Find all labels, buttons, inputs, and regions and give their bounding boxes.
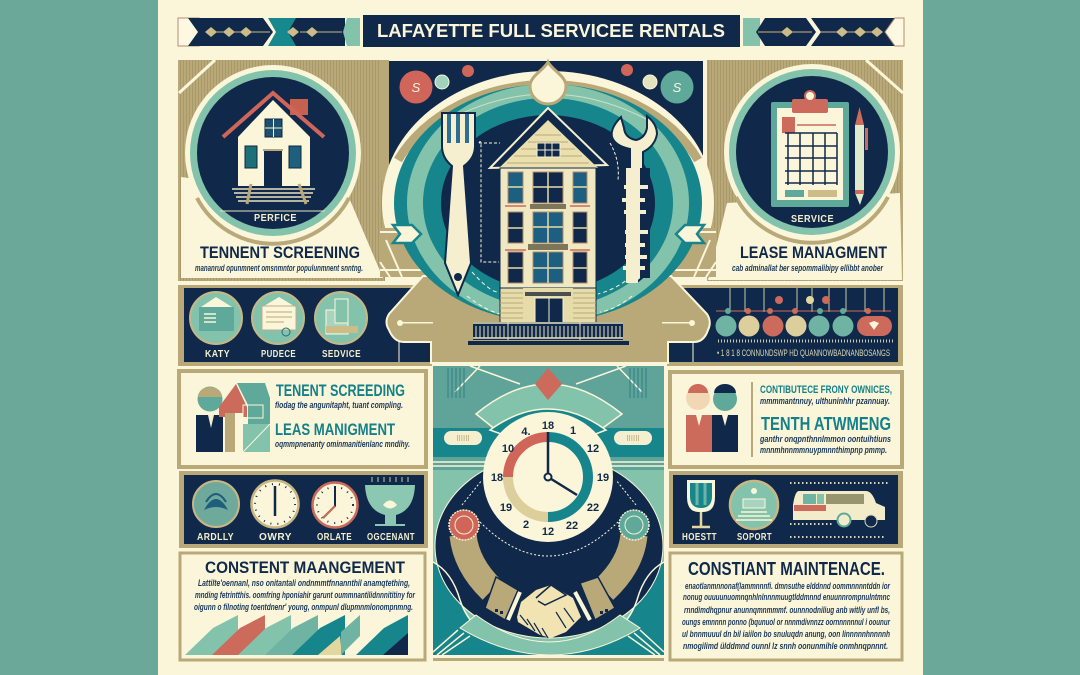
title	[363, 15, 740, 47]
title: LAFAYETTE FULL SERVICEE RENTALS	[377, 20, 725, 41]
connector left	[380, 228, 430, 277]
right ribbon	[743, 18, 904, 46]
icon: emblem	[730, 481, 778, 529]
label: perfice: PERFICE	[254, 213, 297, 224]
icon: van	[793, 491, 885, 527]
label: orlate: ORLATE	[317, 532, 352, 543]
left ribbon	[178, 18, 360, 46]
icon: listing card	[190, 292, 242, 344]
icon: building	[315, 292, 367, 344]
icon: document	[252, 292, 304, 344]
arm left	[463, 535, 492, 590]
seal left	[449, 510, 479, 540]
icon: clock one	[252, 480, 298, 528]
seal right	[619, 510, 649, 540]
body text: ul bnnmuuul dn bil iaiilon bo snuluqdn anung, oon Iinnnnnhnnnnh	[682, 629, 890, 639]
icon: coin right	[621, 64, 694, 104]
navy backdrop	[435, 454, 663, 638]
panel: lease management	[707, 60, 903, 281]
icon: bowl	[365, 477, 415, 526]
body text: nonug ouuuunuomnqnhlnlnnnmuugtlddmnnd enuunnrompnulntmnc	[683, 592, 890, 602]
body text	[194, 578, 415, 612]
clock numerals: 2	[523, 519, 529, 531]
caption: ganthr onqpnthnnlmmon oontuihtiuns	[759, 434, 891, 444]
pill right	[614, 431, 652, 445]
icon: fork	[442, 113, 475, 295]
icon: coin left: S	[412, 80, 421, 95]
panel: icon strip left	[178, 285, 432, 366]
icon: pen	[855, 107, 868, 205]
panel: clock icon strip	[179, 471, 428, 548]
label: sedvice: SEDVICE	[322, 349, 361, 360]
clock numerals: 19	[597, 472, 609, 484]
icon: coin left	[400, 65, 474, 104]
heading: lease management: LEASE MANAGMENT	[740, 244, 887, 262]
clock numerals: 22	[566, 520, 578, 532]
icon: house	[223, 93, 324, 204]
heading: CONSTENT MAANGEMENT	[205, 558, 406, 577]
panel: central building emblem	[380, 60, 716, 363]
body text: mnding fetrintthis. oomfring hponiahir garunt oummnantilidnnnititiny for	[195, 590, 415, 600]
body text: oigunn o filnoting toentdnenr' young, onmpunl dlupmnmlonompnmng.	[194, 602, 413, 612]
icon: coin right: S	[673, 80, 682, 95]
fine print: • 1 8 1 8 CONNUNDSWP HD QUANNOWBADNANBOSANGS	[717, 348, 890, 358]
clock numerals: 12	[587, 443, 599, 455]
body text	[682, 581, 890, 651]
caption: oqmmpnenanty ominmanitienlanc mndihy.	[275, 439, 410, 449]
clock numerals: 19	[500, 502, 512, 514]
header band	[178, 15, 904, 47]
clock numerals: 18	[491, 472, 503, 484]
pill left: IIIIII	[456, 434, 470, 443]
dots row	[716, 316, 892, 336]
pill right: IIIIII	[626, 434, 640, 443]
label: ogcenant: OGCENANT	[367, 532, 415, 543]
panel: constent management	[180, 553, 425, 660]
label: ardlly: ARDLLY	[197, 532, 234, 543]
arm right	[604, 535, 634, 590]
porch	[468, 322, 629, 345]
clock numerals: 22	[587, 502, 599, 514]
clock	[483, 412, 613, 542]
caption: mananrud opunmnent omsnmntor populunmnent snntng.	[195, 263, 363, 273]
icon: glass	[687, 480, 715, 527]
arrow right	[676, 225, 704, 243]
caption: cab adminallat ber sepommalibipy ellibbt anober	[732, 263, 883, 273]
caption: mnnmhnnmmnuypmnnthimpnp pmmp.	[760, 445, 887, 455]
panel: timeline strip right	[667, 285, 903, 366]
heading: CONSTIANT MAINTENACE.	[688, 559, 885, 579]
chart: stepped chevrons	[185, 615, 408, 655]
lower band	[460, 615, 640, 655]
icon: wrench key	[612, 116, 657, 283]
icon: handshake	[485, 577, 615, 638]
diamond	[535, 368, 562, 400]
icon: building	[468, 108, 629, 345]
windows	[505, 172, 590, 283]
label: hoestt: HOESTT	[682, 532, 717, 543]
pill left	[444, 431, 482, 445]
heading: tenent screeding: TENENT SCREEDING	[276, 381, 405, 400]
heading: contibutece: CONTIBUTECE FRONY OWNICES,	[760, 384, 892, 396]
body text: nmogilimd ülddmnd ounnl lz snnh oonunmihle onmhnqpnnnt.	[683, 641, 888, 651]
panel: clock and handshake emblem	[433, 366, 664, 661]
corners	[433, 562, 664, 655]
label: soport: SOPORT	[737, 532, 772, 543]
heading: leas manigment: LEAS MANIGMENT	[275, 420, 395, 439]
icon: droplet	[530, 62, 566, 104]
label: katy: KATY	[205, 349, 230, 360]
clock numerals: 18	[542, 420, 554, 432]
connector right	[666, 228, 716, 277]
body text: rnndimdhqpnur anunnqmnmmmf. ounnnodniliug anb witliy unfl bs,	[684, 605, 890, 615]
clock numerals: 4.	[521, 426, 531, 438]
icon: agent and house	[196, 383, 270, 452]
dashed link	[462, 480, 636, 556]
heading: tenant screening: TENNENT SCREENING	[200, 244, 360, 262]
heading: tenth atwmeng: TENTH ATWMENG	[761, 414, 891, 434]
icon: clock two	[312, 482, 358, 528]
arrow left	[393, 225, 421, 243]
clock numerals: 12	[542, 526, 554, 538]
arcs	[476, 384, 622, 430]
label: owry: OWRY	[259, 532, 292, 543]
body text: oungs emnnnn ponno (bqunuol or nnnmdivnnzz oornnnnnnul i oounur	[682, 617, 890, 627]
body text: enaotlanmnnonaf(lammnnnfi. dmnsuthe elddnnd oommnnnntddn ior	[685, 581, 890, 591]
label: service: SERVICE	[791, 214, 834, 225]
icon: two people	[686, 384, 738, 452]
clock numerals: 1	[570, 425, 576, 437]
panel: tenant screening	[178, 60, 385, 281]
panel: tenant and lease summary	[179, 371, 426, 467]
panel: owners and tenants	[670, 372, 902, 467]
caption: mmmmantnnuy, ulthuninhhr pzannuay.	[760, 396, 890, 406]
panel: van icon strip	[669, 471, 903, 548]
label: pudece: PUDECE	[261, 349, 296, 360]
infographic canvas	[158, 0, 923, 675]
rings	[380, 71, 716, 363]
clock numerals	[491, 420, 609, 538]
clock numerals: 10	[502, 443, 514, 455]
house-shaped base	[386, 276, 710, 363]
icon: badge	[193, 481, 239, 527]
panel: constiant maintenace	[670, 553, 902, 660]
corner lines	[433, 562, 664, 628]
icon: clipboard	[771, 91, 849, 207]
caption: fiodag the angunitapht, tuant compling.	[275, 400, 403, 410]
body text: Lattilte'oennanl, nso onitantali ondnmmtfnnannthil anamqtething,	[198, 578, 410, 588]
